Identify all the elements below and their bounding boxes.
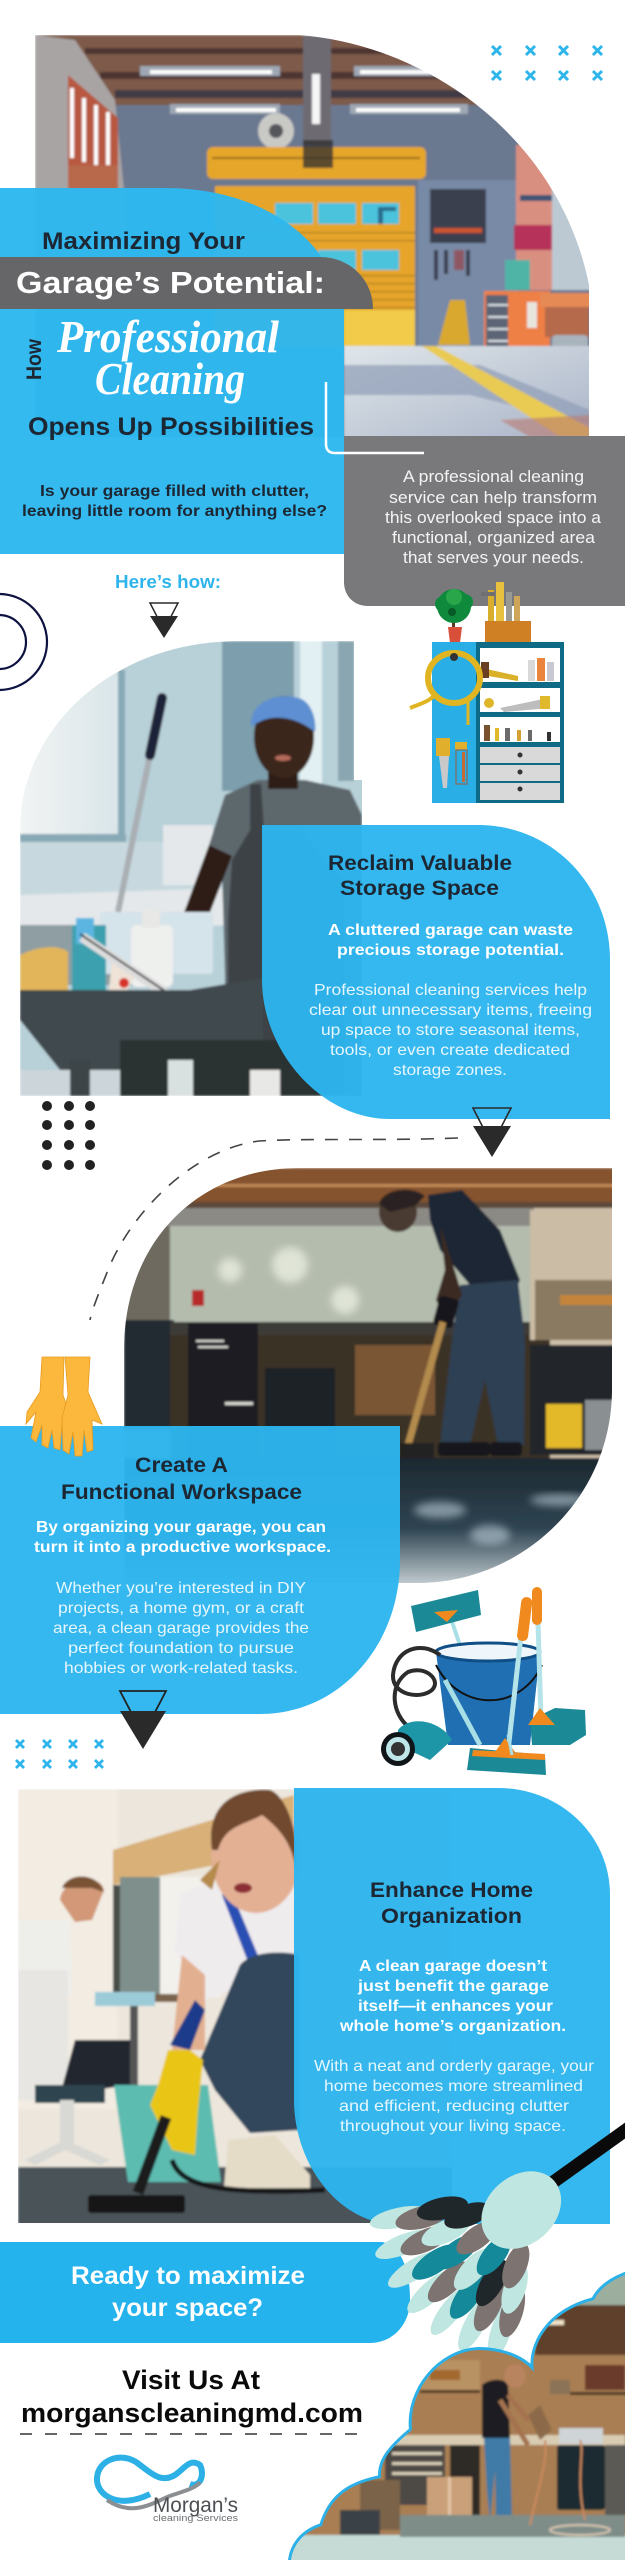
body text: Professional cleaning services help [314,982,587,999]
visit us text: morganscleaningmd.com [21,2398,363,2428]
icon: rubber gloves [26,1357,102,1456]
saws [436,738,467,788]
body text: area, a clean garage provides the [53,1620,309,1637]
dashed connector [90,1138,458,1320]
logo swoosh [97,2458,202,2508]
description text: functional, organized area [392,529,596,547]
photo: woman vacuuming [18,1789,371,2223]
section heading: Reclaim Valuable [328,852,512,875]
visit us text [21,2365,363,2428]
section heading [61,1454,302,1504]
body text [53,1580,309,1677]
vacuum [381,1721,452,1766]
call to action text: your space? [112,2294,263,2322]
heading line: Maximizing Your: Maximizing Your [42,228,245,255]
section heading: Storage Space [340,877,499,900]
heading line: Garage's Potential: Garage’s Potential: [16,265,325,300]
lead sentence: just benefit the garage [357,1978,549,1995]
cart [100,912,213,974]
logo wordmark: Morgan’s [153,2494,238,2517]
woman [205,1888,294,2000]
man [208,778,362,986]
lead sentence [328,922,573,959]
mop [411,1590,481,1660]
panel: reclaim storage [262,825,610,1119]
photo: technician in garage (cloud shape) [285,2270,625,2560]
panel: gray description [344,436,625,606]
section heading [328,852,512,900]
shoe [224,2135,310,2188]
lead sentence: precious storage potential. [337,942,564,959]
section heading: Create A [135,1454,228,1477]
section heading [370,1879,533,1928]
body text: projects, a home gym, or a craft [58,1600,305,1617]
section heading: Enhance Home [370,1879,533,1902]
decorative concentric circles [0,594,47,690]
connector line [326,382,424,453]
decorative crosses: top right [492,46,602,80]
intro question [22,483,327,520]
lead sentence: A cluttered garage can waste [328,922,573,939]
arrow: down 3 [120,1691,166,1749]
intro question: Is your garage filled with clutter, [40,483,309,500]
tool box [481,582,531,642]
script word: Cleaning: Cleaning [95,353,245,404]
chair [60,2040,130,2095]
title block [16,228,325,441]
call to action text [71,2262,305,2322]
intro question: leaving little room for anything else? [22,503,327,520]
heading line: Opens Up Possibilities: Opens Up Possibilities [28,413,314,441]
hose [410,653,480,725]
plant [435,589,473,643]
panel: enhance home organization [294,1788,610,2224]
icon: feather duster [342,2107,625,2386]
photo: man mopping garage floor [124,1168,620,1588]
logo: Morgan's Cleaning Services [97,2458,239,2523]
lead sentence: whole home’s organization. [339,2018,566,2035]
man [428,1190,520,1285]
body text: tools, or even create dedicated [330,1042,570,1059]
arrow: down 2 [473,1108,511,1157]
section heading: Organization [381,1905,522,1928]
lead sentence: A clean garage doesn’t [359,1958,548,1975]
arrow: down 1 [150,603,178,638]
body text: clear out unnecessary items, freeing [309,1002,592,1019]
bucket [436,1643,542,1745]
panel: functional workspace [0,1426,400,1714]
body text: up space to store seasonal items, [321,1022,580,1039]
broom [467,1735,546,1775]
body text: storage zones. [393,1062,507,1079]
logo tagline: cleaning Services [153,2513,239,2523]
lead sentence: turn it into a productive workspace. [34,1539,331,1556]
man [482,2380,510,2438]
panel: call to action [0,2242,410,2343]
script word: Professional: Professional [56,311,279,362]
body text: perfect foundation to pursue [68,1640,294,1657]
vacuum wand [138,2117,166,2193]
rotated word: How: How [23,338,46,380]
body text [314,2058,595,2135]
lead sentence: By organizing your garage, you can [36,1519,326,1536]
body text [309,982,592,1079]
photo: clean garage interior [35,35,596,440]
lead sentence: itself—it enhances your [358,1998,553,2015]
mop handle [118,755,150,912]
hose [393,1648,480,1745]
description text: that serves your needs. [403,549,584,567]
man in background [18,1920,72,2010]
body text: With a neat and orderly garage, your [314,2058,595,2075]
panel: gray title band [0,257,373,309]
dot grid [42,1101,95,1170]
body text: and efficient, reducing clutter [339,2098,570,2115]
icon: cleaning bucket and tools [381,1587,586,1775]
bucket [114,2085,221,2182]
body text: throughout your living space. [340,2118,566,2135]
body text: home becomes more streamlined [324,2078,583,2095]
description text [385,468,602,567]
call to action text: Ready to maximize [71,2262,305,2290]
lead sentence [339,1958,566,2035]
description text: A professional cleaning [403,468,584,486]
panel: intro blue [0,188,344,554]
body text: Whether you’re interested in DIY [56,1580,306,1597]
decorative crosses: left [16,1740,103,1768]
brush [528,1708,586,1745]
handles [507,1587,542,1760]
section heading: Functional Workspace [61,1481,302,1504]
body text: hobbies or work-related tasks. [64,1660,298,1677]
visit us text: Visit Us At [122,2365,260,2395]
description text: service can help transform [389,489,597,507]
icon: tool shelf [410,582,564,803]
photo: cleaner with cart [20,641,365,1096]
description text: this overlooked space into a [385,509,602,527]
lead sentence [34,1519,331,1556]
label: Here's how: Here’s how: [115,572,221,592]
